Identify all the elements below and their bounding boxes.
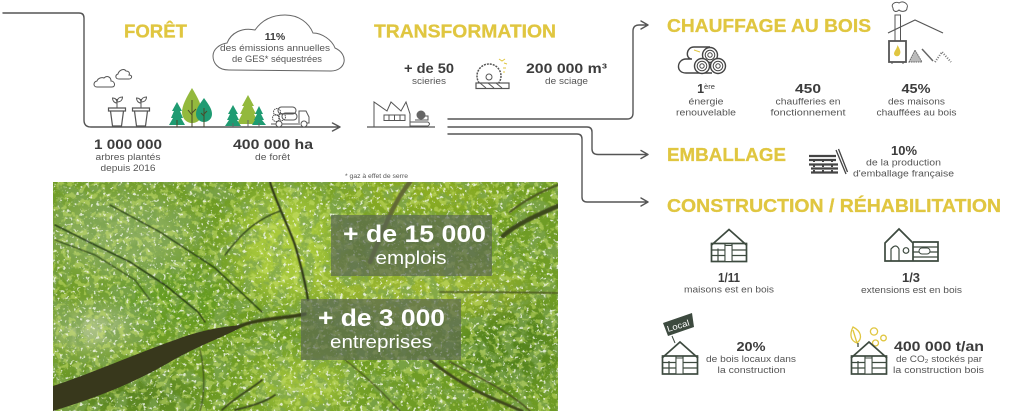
stat: 450 chaufferies: 450 xyxy=(795,82,821,96)
icon: leaf and CO2 bubbles xyxy=(851,327,886,347)
icon: first group of trees xyxy=(169,88,212,127)
icon: plant pots xyxy=(108,97,150,126)
stat: 1 000 000 arbres: 1 000 000 xyxy=(94,137,162,152)
stat: 450 chaufferies: fonctionnement xyxy=(770,108,846,118)
stat: 20% bois locaux: la construction xyxy=(718,365,786,375)
photo: forest canopy xyxy=(50,179,560,411)
stat: 1 000 000 arbres xyxy=(94,137,162,173)
stat: 400 000 ha: 400 000 ha xyxy=(233,137,314,152)
stat: 20% bois locaux xyxy=(706,340,797,375)
stat: 1/3 extensions: extensions est en bois xyxy=(861,285,963,295)
stat: 1/3 extensions: 1/3 xyxy=(902,271,920,285)
icon: logs xyxy=(678,47,726,74)
stat: 400 000 ha: de forêt xyxy=(255,152,291,162)
icon: local sign: Local xyxy=(666,318,691,334)
panel: + de 3 000 entreprises: + de 3 000 xyxy=(318,305,445,332)
panel: + de 15 000 emplois xyxy=(331,215,492,276)
icon: pallets xyxy=(809,149,848,174)
arrow: to construction xyxy=(448,134,648,206)
panel: + de 3 000 entreprises xyxy=(301,299,461,360)
stat: 400 000 t/an: 400 000 t/an xyxy=(894,339,984,354)
arrow: forêt timeline xyxy=(3,13,340,131)
heading: construction: CONSTRUCTION / RÉHABILITATION xyxy=(667,195,1001,216)
stat: 400 000 ha xyxy=(233,137,314,162)
icon: second group of trees xyxy=(225,95,266,127)
icon: small clouds xyxy=(94,70,132,87)
text: 11%: 11% xyxy=(265,31,286,43)
stat: 10% emballage xyxy=(853,144,954,178)
stat: + de 50 scieries xyxy=(404,61,454,86)
heading: emballage: EMBALLAGE xyxy=(667,144,786,165)
stat: 200 000 m3: de sciage xyxy=(545,76,588,86)
icon: local house xyxy=(662,342,698,374)
stat: 1ère énergie renouvelable: énergie xyxy=(688,96,724,106)
icon: saw xyxy=(476,59,509,88)
stat: 1ère énergie renouvelable: renouvelable xyxy=(676,108,736,118)
icon: CO2 house xyxy=(851,342,887,374)
stat: 200 000 m3: 200 000 m³ xyxy=(526,61,608,76)
stat: 1 000 000 arbres: arbres plantés xyxy=(96,152,161,162)
stat: 1/11 maisons: maisons est en bois xyxy=(684,284,775,294)
stat: 1ère énergie renouvelable xyxy=(676,82,736,118)
stat: 10% emballage: 10% xyxy=(891,144,917,158)
arrow: to emballage xyxy=(448,127,648,158)
panel: + de 15 000 emplois: emplois xyxy=(376,248,446,268)
icon: house with extension xyxy=(885,229,938,261)
stat: 1/11 maisons xyxy=(684,271,775,294)
stat: 20% bois locaux: 20% xyxy=(736,340,766,354)
stat: 1/11 maisons: 1/11 xyxy=(718,271,740,285)
stat: 20% bois locaux: de bois locaux dans xyxy=(706,354,797,364)
icon: local sign xyxy=(663,313,694,343)
stat: 45% maisons: 45% xyxy=(902,82,930,96)
stat: + de 50 scieries: scieries xyxy=(412,76,447,86)
heading: forêt: FORÊT xyxy=(124,20,188,42)
panel: + de 15 000 emplois: + de 15 000 xyxy=(343,221,486,248)
stat: 10% emballage: d'emballage française xyxy=(853,168,954,178)
stat: 450 chaufferies xyxy=(770,82,846,118)
stat: 400 000 t/an xyxy=(893,339,985,375)
stat: 10% emballage: de la production xyxy=(866,158,941,168)
heading: transformation: TRANSFORMATION xyxy=(374,20,556,42)
stat: 45% maisons: des maisons xyxy=(888,96,946,106)
icon: factory xyxy=(367,102,435,127)
stat: 200 000 m3 xyxy=(526,61,608,86)
stat: 1ère énergie renouvelable: ère xyxy=(704,82,715,91)
text: GES: de GES* séquestrées xyxy=(232,54,323,64)
stat: 400 000 t/an: de CO₂ stockés par xyxy=(896,354,982,364)
footnote: * gaz à effet de serre xyxy=(345,174,409,180)
stat: 1 000 000 arbres: depuis 2016 xyxy=(100,163,156,173)
stat: 45% maisons xyxy=(876,82,957,118)
stat: 1ère énergie renouvelable: 1 xyxy=(697,82,704,96)
trunk xyxy=(53,324,248,411)
stat: 1/3 extensions xyxy=(861,271,963,295)
stat: 400 000 t/an: la construction bois xyxy=(893,365,985,375)
panel: + de 3 000 entreprises: entreprises xyxy=(330,332,432,352)
icon: log truck xyxy=(271,107,309,127)
heading: chauffage au bois: CHAUFFAGE AU BOIS xyxy=(667,15,871,36)
callout: cloud 11% xyxy=(213,15,344,71)
text: émissions: des émissions annuelles xyxy=(220,43,331,53)
stat: 45% maisons: chauffées au bois xyxy=(876,108,957,118)
icon: wooden house xyxy=(711,230,747,262)
stat: + de 50 scieries: + de 50 xyxy=(404,61,454,76)
stat: 450 chaufferies: chaufferies en xyxy=(776,96,840,106)
icon: stove with chimney and roof xyxy=(888,2,951,64)
arrow: to chauffage xyxy=(448,21,648,119)
